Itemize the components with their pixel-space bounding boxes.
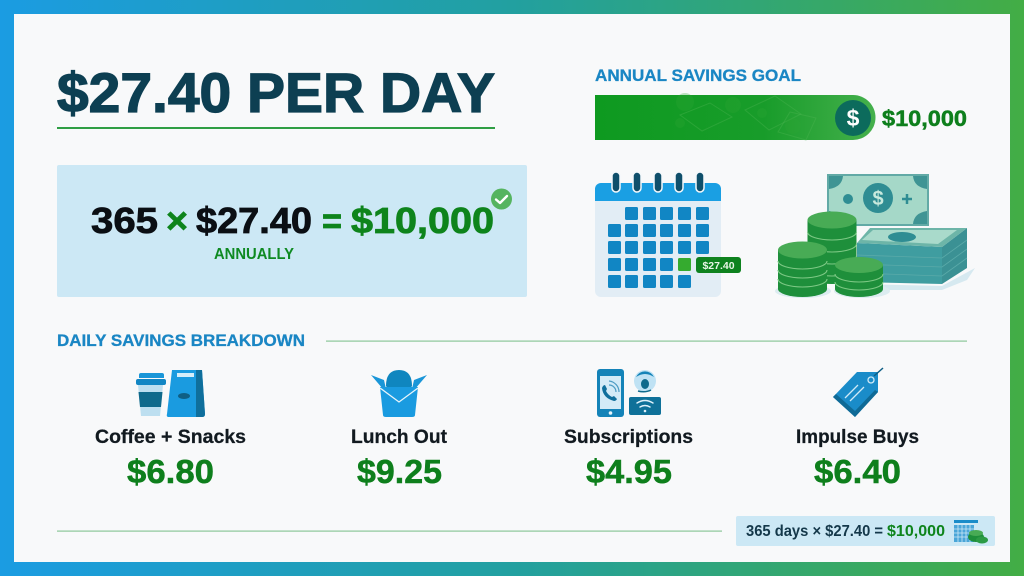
label: Impulse Buys — [796, 426, 919, 448]
banknote back — [827, 174, 929, 226]
formula equation: $27.40 — [196, 200, 312, 241]
cash stack — [857, 228, 975, 290]
label: Coffee + Snacks — [95, 426, 246, 448]
formula equation — [91, 200, 494, 241]
formula equation: = — [322, 200, 342, 241]
title: $27.40 PER DAY — [57, 61, 495, 124]
icon: calendar — [595, 172, 741, 297]
breakdown item: coffee and snacks — [95, 370, 246, 490]
panel: formula — [57, 165, 527, 297]
coin stack middle — [808, 212, 856, 284]
formula equation: 365 — [91, 200, 158, 241]
goal heading: ANNUAL SAVINGS GOAL — [595, 67, 801, 85]
icon: cash and coins — [775, 174, 975, 298]
value: $4.95 — [586, 453, 672, 490]
value: $6.80 — [127, 453, 214, 490]
icon: dollar coin — [835, 100, 871, 136]
coin stack right — [834, 257, 890, 298]
label: Lunch Out — [351, 426, 447, 448]
coin stack left — [775, 242, 831, 298]
breakdown item: lunch out — [351, 370, 447, 490]
formula equation: × — [166, 200, 188, 241]
icon: coffee cup and snack bag — [136, 370, 205, 417]
breakdown item: impulse buys — [796, 368, 919, 490]
summary text: $10,000 — [887, 523, 945, 540]
banknote back: $ — [872, 188, 884, 210]
goal amount: $10,000 — [882, 106, 967, 131]
calendar price tag — [696, 257, 741, 273]
icon: dollar coin: $ — [847, 105, 860, 131]
value: $6.40 — [814, 453, 901, 490]
section heading: daily savings breakdown: DAILY SAVINGS BREAKDOWN — [57, 332, 305, 350]
panel: annual savings goal — [595, 67, 967, 140]
icon: price tag — [833, 368, 883, 417]
annually label: ANNUALLY — [214, 246, 295, 263]
label: Subscriptions — [564, 426, 693, 448]
breakdown item: subscriptions — [564, 369, 693, 490]
calendar price tag: $27.40 — [702, 260, 735, 272]
callout: summary — [736, 516, 995, 546]
icon: mini calendar and coins — [954, 520, 988, 544]
icon: phone, webcam and wifi — [597, 369, 661, 417]
summary text: 365 days × $27.40 = — [746, 523, 883, 540]
progress bar — [595, 93, 876, 140]
value: $9.25 — [357, 453, 442, 490]
icon: check badge — [491, 188, 512, 210]
formula equation: $10,000 — [351, 200, 494, 241]
icon: takeout box — [371, 370, 427, 417]
